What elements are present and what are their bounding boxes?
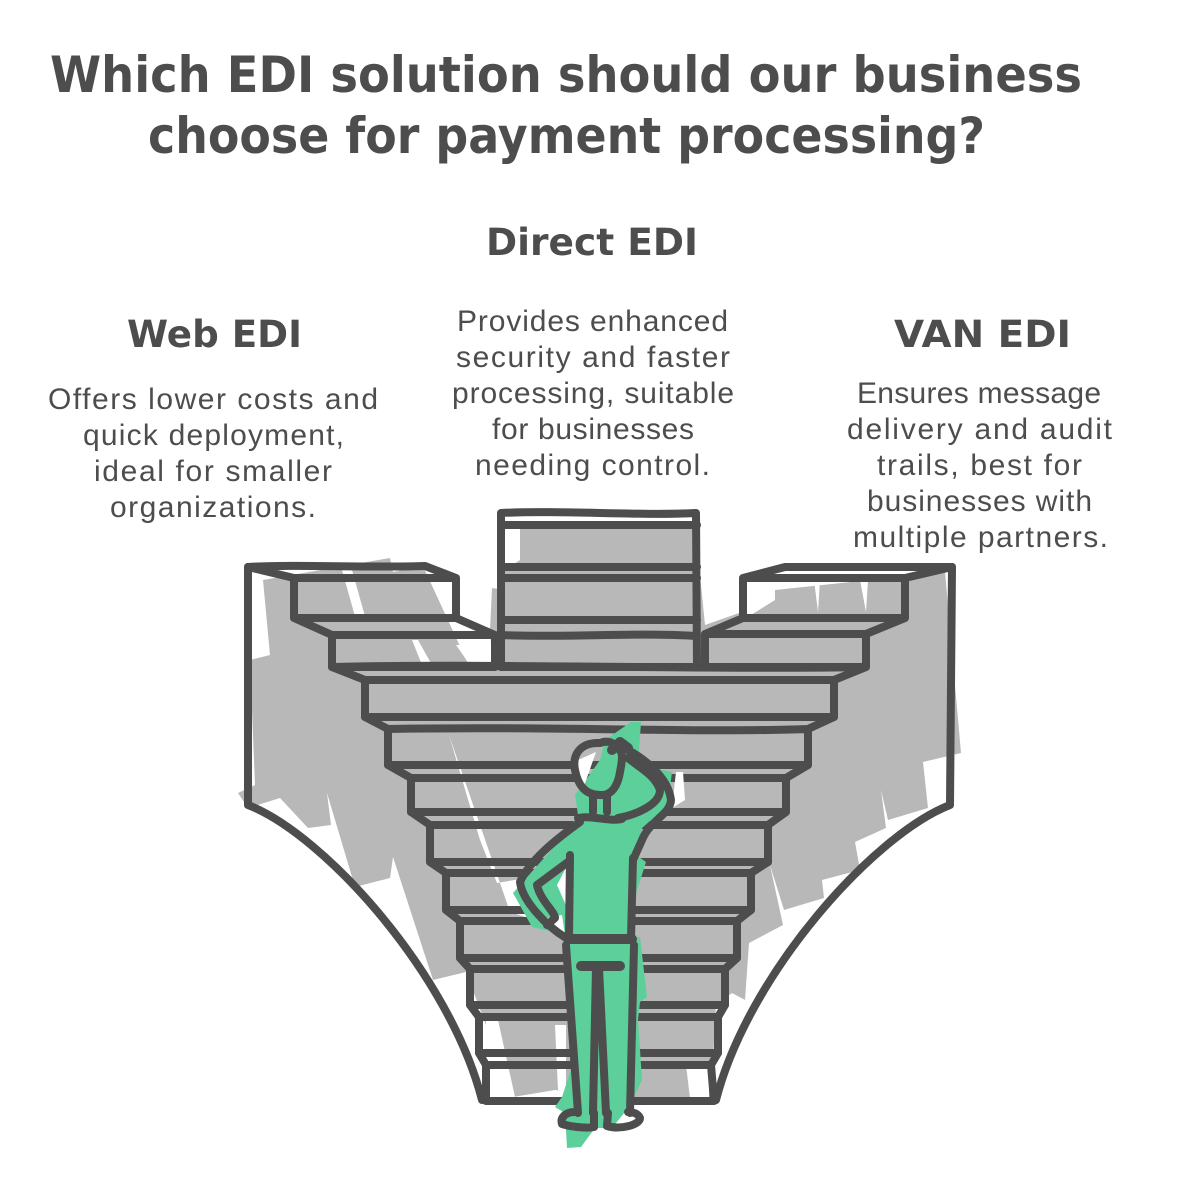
option: Direct EDI text: processing, suitable: [452, 377, 734, 410]
hand on head: [612, 742, 628, 750]
shoes: [562, 1112, 640, 1128]
neck: [593, 796, 607, 812]
option: Web EDI text: organizations.: [110, 491, 316, 524]
option: VAN EDI text: trails, best for: [877, 449, 1082, 482]
title: choose for payment processing?: [148, 107, 985, 165]
figure: person seen from behind scratching head: [513, 722, 685, 1148]
option: Web EDI text: [48, 313, 378, 524]
option: Web EDI text: quick deployment,: [83, 419, 344, 452]
white gaps: [577, 752, 596, 792]
option: VAN EDI text: Ensures message: [857, 377, 1101, 410]
option: Direct EDI text: Direct EDI: [486, 221, 698, 264]
central tower: [501, 512, 697, 667]
option: VAN EDI text: businesses with: [867, 485, 1092, 518]
option: Web EDI text: Offers lower costs and: [48, 383, 378, 416]
option: Web EDI text: Web EDI: [127, 313, 302, 356]
legs: [566, 945, 634, 1113]
left wing outer outline: [248, 567, 482, 1100]
option: Direct EDI text: Provides enhanced: [457, 305, 728, 338]
hip arm: [520, 822, 580, 938]
option: Web EDI text: ideal for smaller: [94, 455, 332, 488]
title: Which EDI solution should our business: [50, 46, 1082, 104]
step bands: [332, 666, 866, 717]
staircase outlines: left wing, right wing and central tower: [248, 512, 952, 1101]
option: VAN EDI text: multiple partners.: [853, 521, 1108, 554]
right wing outer outline: [716, 567, 952, 1100]
gray hatched staircase fill: [238, 525, 961, 1100]
option: VAN EDI text: VAN EDI: [894, 313, 1071, 356]
seat crease: [581, 961, 620, 971]
top left steps: [248, 566, 495, 667]
shoulders: [578, 817, 622, 820]
option: VAN EDI text: delivery and audit: [847, 413, 1113, 446]
option: Direct EDI text: for businesses: [492, 413, 694, 446]
belt: [569, 934, 632, 944]
top right steps: [705, 567, 952, 667]
option: Direct EDI text: security and faster: [456, 341, 730, 374]
body outline: [520, 742, 671, 1128]
option: Direct EDI text: [452, 221, 734, 482]
title: [50, 46, 1082, 165]
head: [574, 742, 622, 795]
torso: [569, 855, 633, 938]
option: VAN EDI text: [847, 313, 1113, 554]
green hatch behind figure: [513, 722, 672, 1148]
option: Direct EDI text: needing control.: [475, 449, 710, 482]
raised arm: [618, 745, 671, 860]
